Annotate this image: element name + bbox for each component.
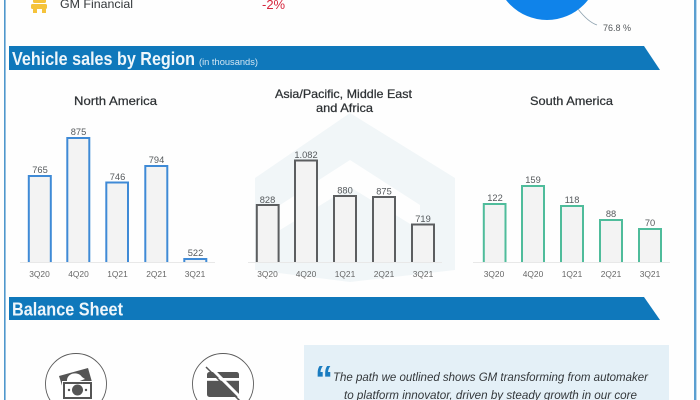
- chart: South America: 118: [565, 195, 579, 205]
- chart: North America: 3Q20: [29, 269, 50, 279]
- chart: North America: 765: [32, 165, 48, 175]
- chart: North America: [20, 94, 215, 279]
- chart: North America: 3Q21: [185, 269, 206, 279]
- icon: GM Financial car stack: [31, 0, 47, 13]
- chart: Asia/Pacific, Middle East and Africa: 1.082: [294, 150, 318, 160]
- chart: South America: 70: [645, 218, 655, 228]
- banner: Balance Sheet: Balance Sheet: [12, 298, 123, 320]
- icon: cash in circle: [46, 354, 106, 400]
- chart: South America: 3Q21: [640, 269, 661, 279]
- banner: Vehicle sales by Region: [9, 46, 660, 70]
- chart: South America: 1Q21: [562, 269, 583, 279]
- chart: North America: 1Q21: [107, 269, 128, 279]
- chart: Asia/Pacific, Middle East and Africa: 1Q21: [335, 269, 356, 279]
- quote panel: “: [315, 358, 333, 399]
- chart: South America: 159: [525, 175, 541, 185]
- chart: South America: 4Q20: [523, 269, 544, 279]
- watermark: house logo: [255, 113, 455, 282]
- chart: South America: South America: [530, 94, 613, 108]
- pie chart: [495, 0, 631, 33]
- banner: Vehicle sales by Region: (in thousands): [199, 57, 258, 67]
- chart: North America: North America: [74, 94, 157, 108]
- chart: Asia/Pacific, Middle East and Africa: Asia/Pacific, Middle East: [275, 87, 413, 101]
- chart: Asia/Pacific, Middle East and Africa: [248, 87, 442, 279]
- chart: South America: 2Q21: [601, 269, 622, 279]
- chart: South America: 88: [606, 209, 616, 219]
- banner: Balance Sheet: [9, 297, 660, 320]
- quote panel: [304, 345, 669, 400]
- chart: Asia/Pacific, Middle East and Africa: 4Q20: [296, 269, 317, 279]
- chart: North America: 794: [149, 155, 164, 165]
- icon: crossed out credit card in circle: [192, 354, 254, 400]
- chart: South America: 3Q20: [484, 269, 505, 279]
- chart: Asia/Pacific, Middle East and Africa: 719: [415, 214, 431, 224]
- chart: North America: 875: [71, 127, 86, 137]
- chart: North America: 522: [188, 248, 203, 258]
- chart: Asia/Pacific, Middle East and Africa: 2Q21: [374, 269, 395, 279]
- chart: Asia/Pacific, Middle East and Africa: 3Q20: [257, 269, 278, 279]
- chart: Asia/Pacific, Middle East and Africa: and Africa: [316, 101, 373, 115]
- banner: Vehicle sales by Region: Vehicle sales by Region: [12, 48, 195, 69]
- chart: South America: [473, 94, 670, 279]
- pie chart: 76.8 %: [603, 22, 631, 33]
- chart: North America: 746: [110, 172, 125, 182]
- chart: Asia/Pacific, Middle East and Africa: 3Q21: [413, 269, 434, 279]
- chart: Asia/Pacific, Middle East and Africa: 875: [376, 186, 392, 196]
- chart: North America: 4Q20: [68, 269, 89, 279]
- chart: North America: 2Q21: [146, 269, 167, 279]
- chart: Asia/Pacific, Middle East and Africa: 828: [260, 195, 275, 205]
- quote panel: The path we outlined shows GM transforming from automaker: [333, 372, 649, 384]
- chart: Asia/Pacific, Middle East and Africa: 880: [337, 186, 353, 196]
- chart: South America: 122: [487, 193, 503, 203]
